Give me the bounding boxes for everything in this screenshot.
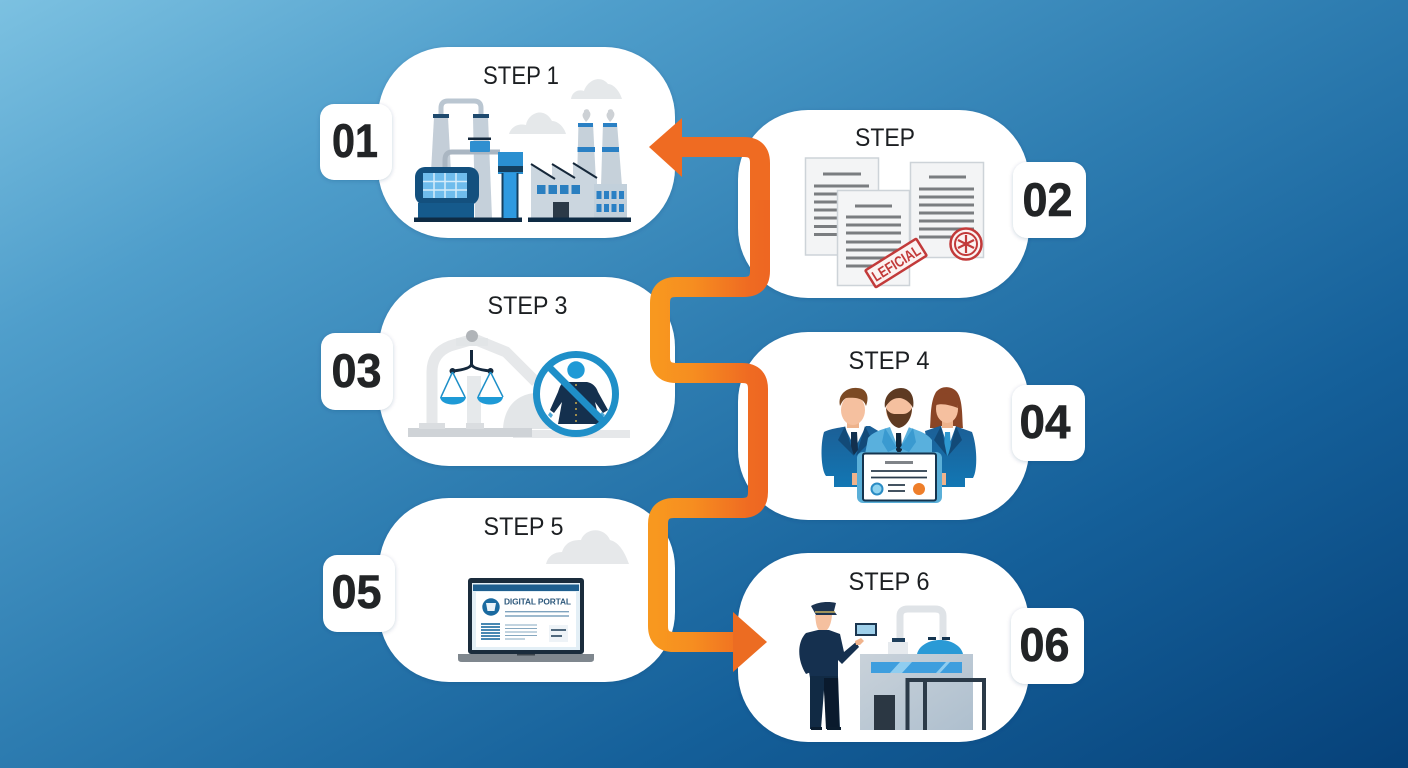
icon: clouds — [509, 79, 622, 134]
icon: documents with stamps — [806, 158, 984, 287]
panel: step 4 — [738, 332, 1029, 520]
icon: facility — [860, 609, 984, 730]
icon: power plant with pipes — [414, 101, 523, 222]
icon: laptop digital portal: DIGITAL PORTAL — [504, 596, 571, 606]
center person — [864, 388, 932, 460]
heading: step 2: STEP — [855, 124, 915, 152]
icon: prohibited official — [534, 352, 618, 436]
icon: laptop digital portal — [458, 578, 594, 662]
panel: step 2 — [738, 110, 1029, 298]
panel: step 5 — [379, 498, 675, 682]
icon: cloud — [546, 530, 629, 564]
panel: step 6 — [738, 553, 1029, 742]
badge: 02 — [1013, 162, 1086, 238]
badge: 05 — [323, 555, 395, 632]
heading: step 5: STEP 5 — [484, 513, 564, 541]
badge: 03: 03 — [332, 344, 382, 397]
left person — [822, 388, 880, 487]
heading: step 3: STEP 3 — [488, 292, 568, 320]
right person — [925, 387, 976, 487]
icon: team with certificate — [822, 387, 976, 503]
icon: documents with stamps: LEFICIAL — [869, 242, 924, 285]
badge: 04: 04 — [1020, 395, 1070, 448]
icon: factory — [528, 109, 631, 222]
badge: 06 — [1011, 608, 1084, 684]
badge: 01 — [320, 104, 392, 180]
panel: step 3 — [379, 277, 675, 466]
process flow arrow — [649, 118, 767, 672]
panel: step 1 — [378, 47, 675, 238]
heading: step 6: STEP 6 — [848, 568, 930, 596]
badge: 04 — [1012, 385, 1085, 461]
badge: 06: 06 — [1020, 618, 1070, 671]
heading: step 1: STEP 1 — [483, 62, 559, 90]
badge: 02: 02 — [1022, 173, 1072, 226]
badge: 01: 01 — [332, 114, 378, 167]
icon: inspector officer — [799, 602, 877, 730]
icon: scales of justice — [408, 330, 630, 438]
badge: 05: 05 — [332, 565, 382, 618]
badge: 03 — [321, 333, 393, 410]
heading: step 4: STEP 4 — [848, 347, 930, 375]
